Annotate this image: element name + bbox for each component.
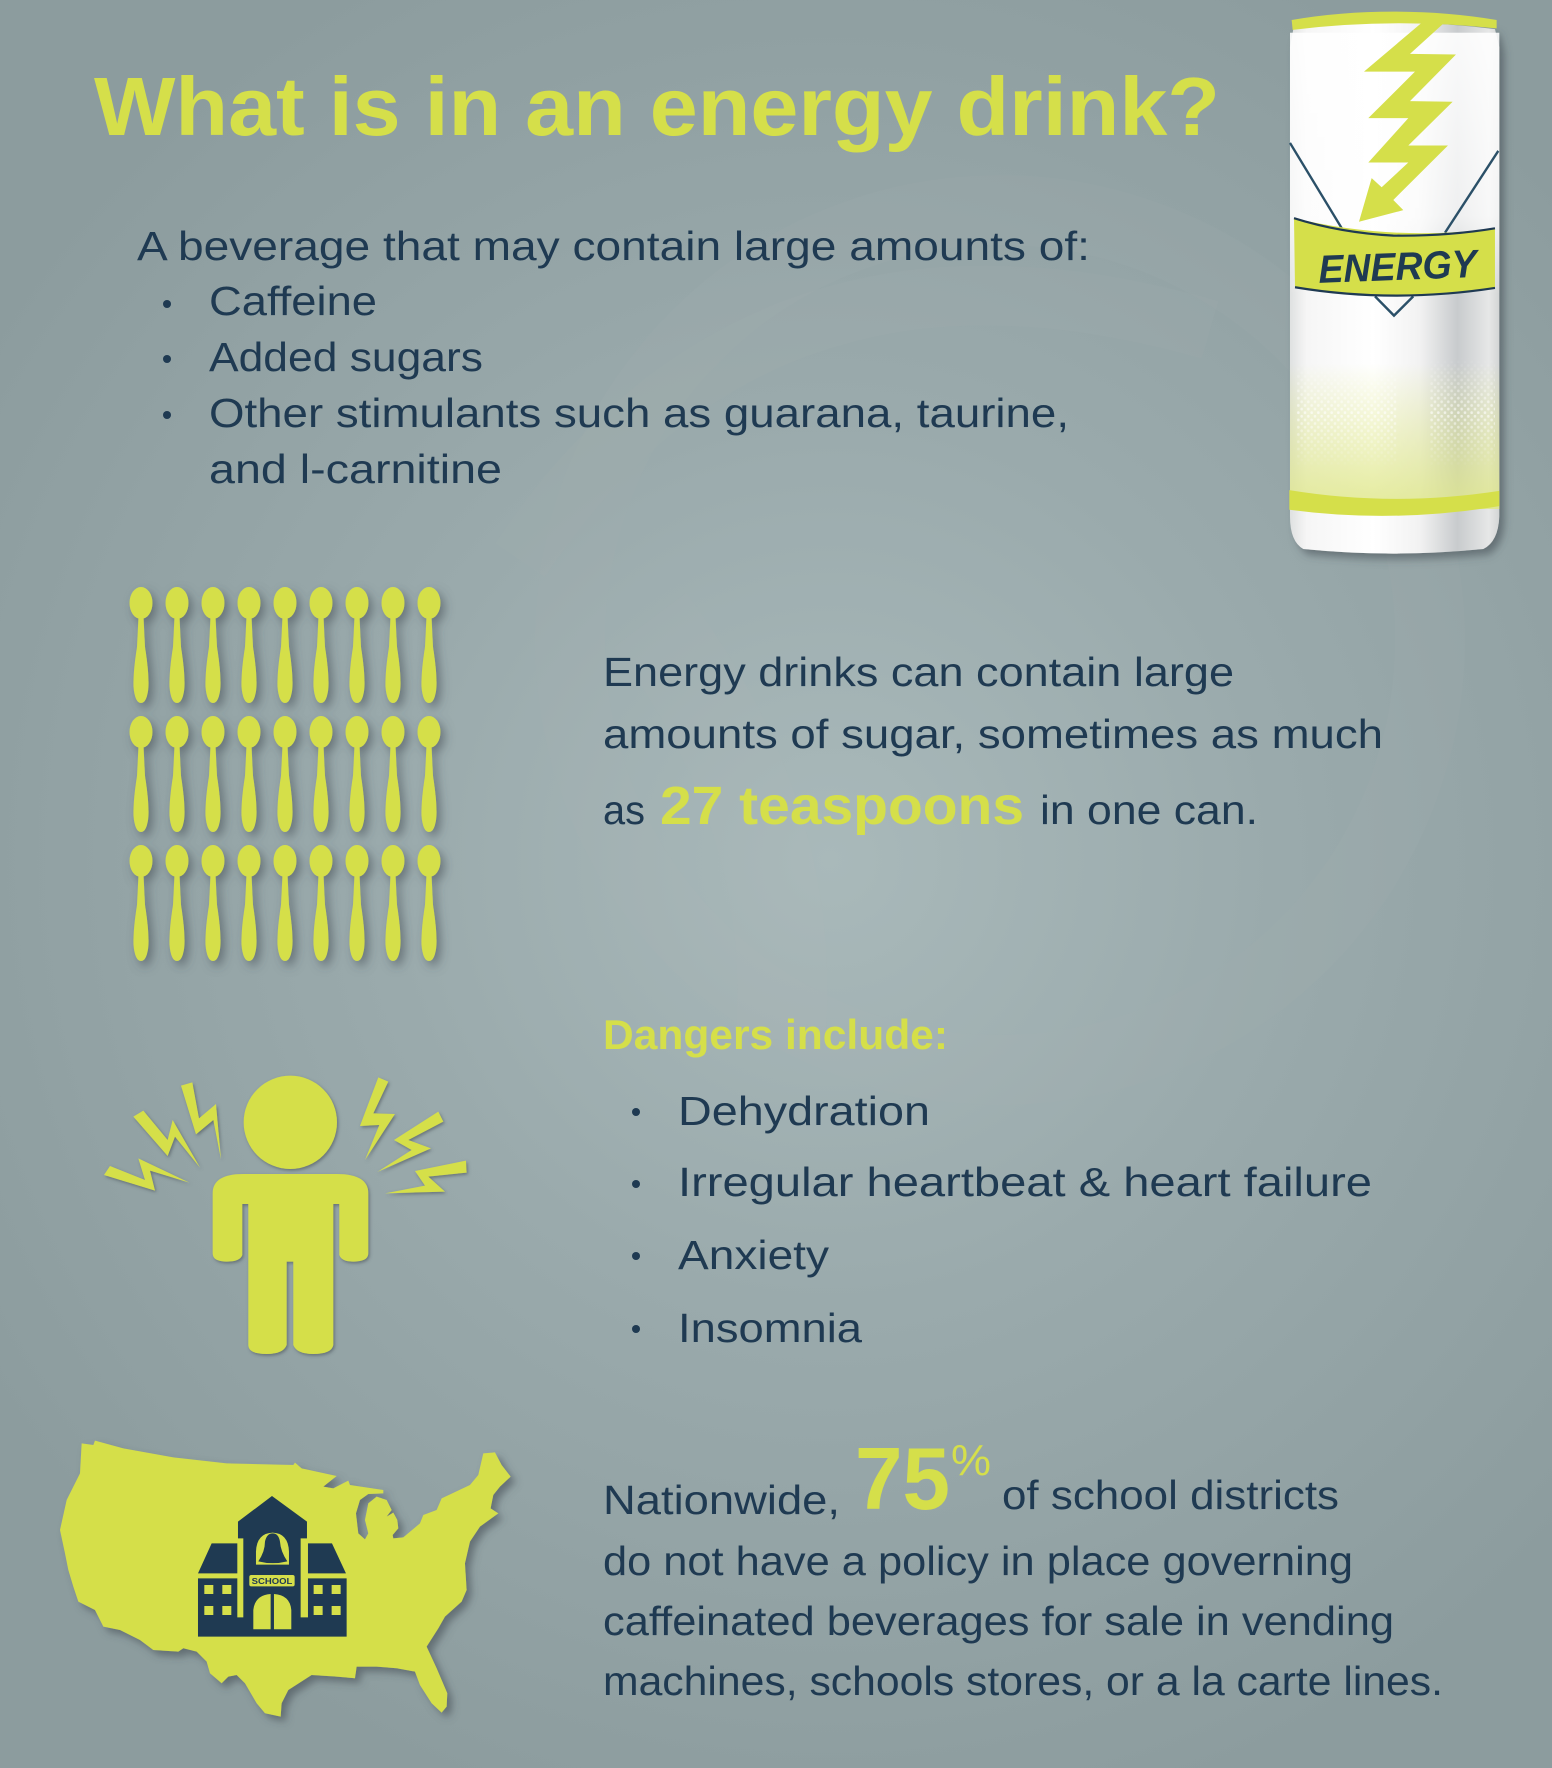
- school policy text block: machines, schools stores, or a la carte lines.: [603, 1658, 1443, 1704]
- 75% statistic: %: [951, 1436, 991, 1485]
- intro text block: Other stimulants such as guarana, taurine,: [209, 390, 1069, 436]
- sugar text block: Energy drinks can contain large: [603, 649, 1234, 695]
- school policy text block: [603, 1429, 1443, 1704]
- dangers list: Insomnia: [678, 1305, 862, 1351]
- icon: energy drink can: [1289, 12, 1499, 554]
- school policy text block: do not have a policy in place governing: [603, 1538, 1353, 1584]
- can label: ENERGY: [1318, 241, 1480, 291]
- icon: 27 teaspoons: [130, 587, 440, 961]
- sugar text block: amounts of sugar, sometimes as much: [603, 711, 1383, 757]
- dangers list: [603, 1011, 1372, 1351]
- sugar text block: in one can.: [1040, 787, 1258, 833]
- intro text block: Caffeine: [209, 278, 377, 324]
- sugar text block: [603, 649, 1383, 836]
- intro text block: A beverage that may contain large amounts of:: [137, 223, 1090, 269]
- school policy text block: Nationwide,: [603, 1477, 840, 1523]
- icon: US map with school: [60, 1441, 511, 1717]
- school policy text block: caffeinated beverages for sale in vending: [603, 1598, 1394, 1644]
- icon: person with shock bolts: [104, 1076, 467, 1354]
- title: What is in an energy drink?: [94, 60, 1220, 153]
- school policy text block: of school districts: [1002, 1472, 1339, 1518]
- dangers list: Irregular heartbeat & heart failure: [678, 1159, 1372, 1205]
- icon: school building: SCHOOL: [252, 1576, 293, 1586]
- sugar text block: as: [603, 787, 645, 833]
- dangers list: Anxiety: [678, 1232, 830, 1278]
- intro text block: [137, 223, 1090, 492]
- dangers list: Dangers include:: [603, 1011, 948, 1058]
- 75% statistic: 75: [855, 1429, 950, 1528]
- intro text block: Added sugars: [209, 334, 483, 380]
- dangers list: Dehydration: [678, 1088, 930, 1134]
- sugar text block: 27 teaspoons: [660, 776, 1024, 836]
- intro text block: and l-carnitine: [209, 446, 502, 492]
- icon: school building: [198, 1496, 347, 1637]
